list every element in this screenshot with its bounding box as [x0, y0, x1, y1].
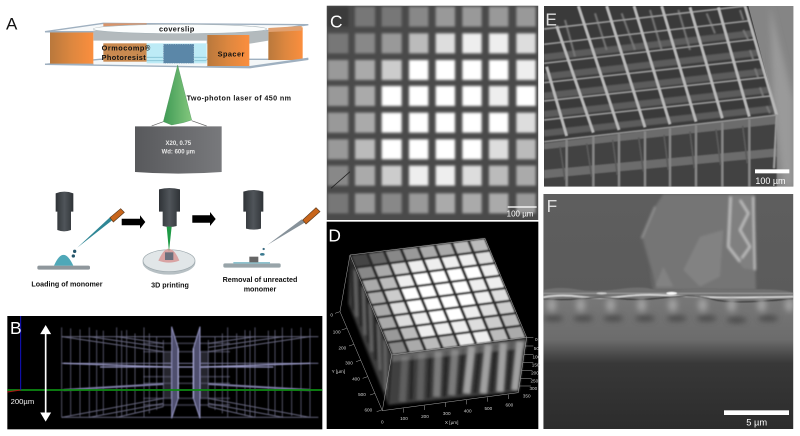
workflow step: loading of monomer: Loading of monomer — [31, 280, 103, 288]
axis labels: 500 — [484, 406, 493, 411]
panel F: SEM cross-section close-up — [543, 194, 794, 429]
scale bar — [724, 410, 789, 415]
assembly labels: coverslip — [159, 24, 195, 33]
axis labels: 200 — [421, 414, 429, 419]
axis labels: 0 — [381, 419, 384, 424]
panel letter A: A — [6, 14, 18, 34]
top face lattice pores — [350, 238, 527, 355]
axis labels: 400 — [464, 409, 472, 414]
panel letter C: C — [330, 12, 343, 32]
laser cone — [152, 65, 291, 126]
axis labels: 150 — [532, 363, 540, 368]
axis labels: 200 — [531, 370, 539, 375]
panel letter F: F — [547, 196, 557, 216]
debris flake — [642, 194, 756, 290]
panel B: 3D lattice design view — [7, 316, 322, 429]
axis labels: 100 — [532, 354, 541, 359]
axis labels: 600 — [505, 403, 514, 408]
panel letter D: D — [328, 226, 341, 246]
scale bar — [508, 206, 537, 208]
axis labels: 200 — [338, 345, 347, 350]
axis labels: 500 — [358, 392, 366, 397]
panel E: SEM image of lattice — [544, 6, 793, 187]
panel letter E: E — [545, 9, 557, 29]
workflow step: removal of unreacted monomer: monomer — [244, 285, 277, 293]
bright lattice pores — [328, 7, 536, 213]
axis labels: 350 — [523, 394, 531, 399]
main objective — [135, 126, 222, 174]
arrow: step two to three — [192, 212, 216, 226]
laser cone: Two-photon laser of 450 nm — [187, 95, 291, 103]
coverslip and spacer assembly: Ormocomp® — [102, 43, 151, 52]
axes with tick marks — [335, 238, 533, 413]
axis labels: 0 — [535, 337, 538, 342]
panel C: fluorescence image of lattice: 100 µm — [507, 210, 534, 219]
top grid of struts — [544, 6, 777, 136]
workflow step: 3D printing — [143, 188, 195, 289]
coverslip and spacer assembly: Spacer — [218, 50, 244, 59]
axis labels: 100 — [400, 416, 408, 421]
axis labels: 100 — [333, 329, 341, 334]
axis labels: 300 — [345, 360, 353, 365]
panel D: confocal 3D reconstruction — [327, 222, 541, 429]
panel letter B: B — [10, 318, 22, 338]
axis labels: 600 — [364, 408, 373, 413]
front side face — [388, 337, 527, 405]
coverslip and spacer assembly — [45, 23, 308, 68]
workflow step: 3D printing: 3D printing — [151, 281, 189, 289]
axis labels: 300 — [443, 411, 451, 416]
axis labels: 250 — [530, 378, 539, 383]
scale bar — [755, 169, 789, 173]
axis labels: 0 — [330, 313, 333, 318]
scale label: 200µm — [11, 397, 34, 406]
panel F: SEM cross-section close-up: 5 µm — [746, 418, 767, 428]
main objective: Wd: 600 µm — [162, 149, 195, 155]
workflow step: removal of unreacted monomer — [223, 190, 320, 293]
axis labels: X [µm] — [445, 420, 458, 425]
panel C: fluorescence image of lattice — [327, 6, 538, 220]
axis labels — [330, 313, 541, 425]
scale arrow — [42, 327, 50, 420]
panel E: SEM image of lattice: 100 µm — [755, 176, 785, 186]
coverslip and spacer assembly: Photoresist — [102, 53, 146, 62]
lower lattice levels seen through pores — [544, 10, 773, 133]
periodic bumps under surface — [543, 298, 794, 323]
axis labels: 300 — [529, 386, 538, 391]
left side face — [348, 255, 392, 405]
lattice wireframe — [62, 327, 318, 418]
arrow: step one to two — [122, 215, 145, 229]
workflow step: removal of unreacted monomer: Removal of unreacted — [223, 276, 297, 284]
axes — [7, 387, 322, 392]
film edge and wavy surface — [543, 287, 793, 302]
axis labels: Y [µm] — [332, 369, 345, 374]
front face of lattice — [544, 115, 777, 187]
main objective: X20, 0.75 — [166, 141, 192, 147]
axis labels: 400 — [352, 377, 360, 382]
panel A: printing setup schematic — [6, 14, 320, 293]
substrate background — [748, 6, 793, 187]
axis labels: 50 — [534, 346, 539, 351]
workflow step: loading of monomer — [31, 192, 124, 288]
